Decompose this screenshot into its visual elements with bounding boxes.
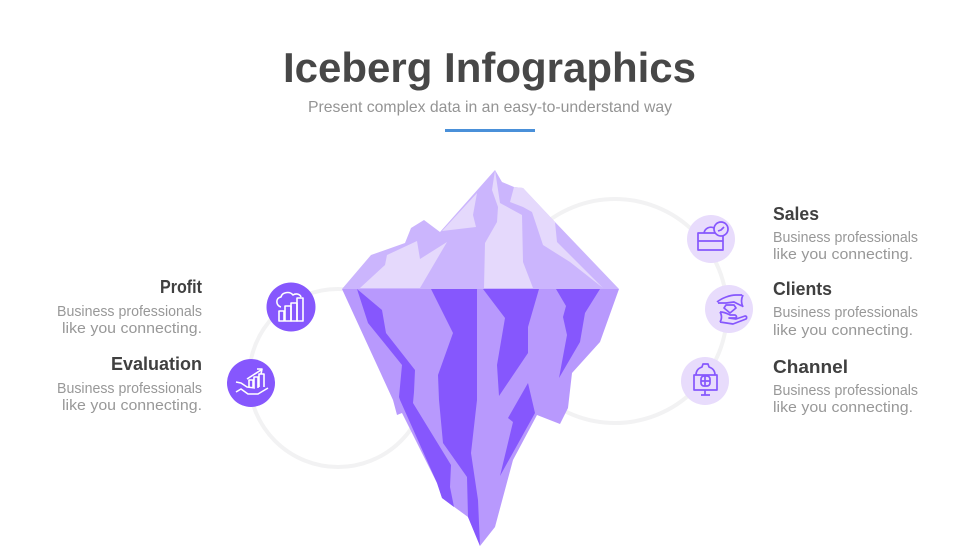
text block: sales: Sales xyxy=(773,203,819,224)
ring: right xyxy=(503,199,727,423)
iceberg xyxy=(342,170,619,546)
text block: sales: Business professionals xyxy=(773,229,918,246)
text block: evaluation: like you connecting. xyxy=(62,397,202,414)
text block: evaluation: Business professionals xyxy=(57,380,202,397)
title underline xyxy=(445,129,535,132)
text block: profit: Business professionals xyxy=(57,303,202,320)
icon: profit xyxy=(266,282,316,332)
icon: evaluation xyxy=(227,359,275,407)
text block: profit: Profit xyxy=(160,276,202,297)
icon: clients xyxy=(705,285,753,333)
ring: left xyxy=(249,289,427,467)
text block: sales xyxy=(773,203,918,263)
text block: clients: Clients xyxy=(773,278,832,299)
text block: clients xyxy=(773,278,918,339)
iceberg: above water xyxy=(342,170,619,289)
title: Iceberg Infographics xyxy=(283,44,696,91)
text block: channel xyxy=(773,356,918,416)
iceberg: below water xyxy=(342,289,619,546)
icon: sales xyxy=(687,215,735,263)
text block: channel: like you connecting. xyxy=(773,399,913,416)
subtitle: Present complex data in an easy-to-understand way xyxy=(308,99,672,116)
icon: channel xyxy=(681,357,729,405)
text block: profit xyxy=(57,276,202,337)
text block: sales: like you connecting. xyxy=(773,246,913,263)
text block: clients: Business professionals xyxy=(773,304,918,321)
text block: channel: Business professionals xyxy=(773,382,918,399)
text block: channel: Channel xyxy=(773,356,848,377)
text block: clients: like you connecting. xyxy=(773,322,913,339)
text block: profit: like you connecting. xyxy=(62,320,202,337)
text block: evaluation: Evaluation xyxy=(111,353,202,374)
text block: evaluation xyxy=(57,353,202,414)
